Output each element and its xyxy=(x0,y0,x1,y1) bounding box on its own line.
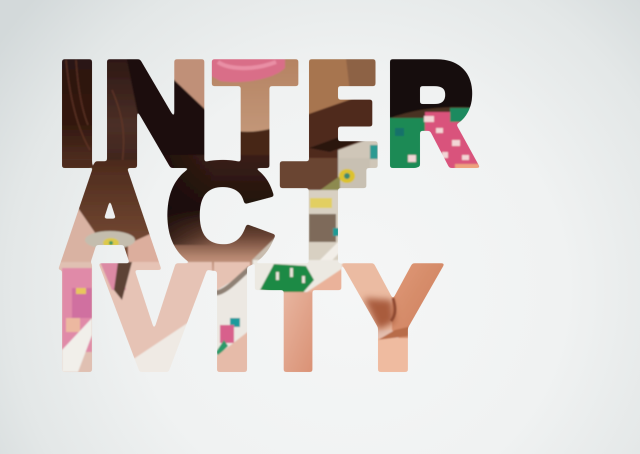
letter Y xyxy=(342,260,446,376)
letter R floral xyxy=(390,106,480,168)
necklace on T stem xyxy=(308,168,366,260)
letter C necklace xyxy=(251,236,275,265)
letter C xyxy=(165,155,277,275)
photo showing through the word INTER ACT IVITY xyxy=(58,59,480,372)
letter A floral xyxy=(85,231,135,249)
letter R hair xyxy=(390,59,472,120)
letter T (row 3) xyxy=(253,260,345,376)
shadow: N diagonal xyxy=(127,59,204,159)
hair streaks xyxy=(66,60,124,165)
letter E skin xyxy=(309,59,353,116)
letter A skin xyxy=(60,208,96,263)
skin: N corner xyxy=(174,59,204,110)
letter I (row 3, second) xyxy=(213,261,251,356)
letter I (row 3) floral xyxy=(59,262,92,372)
letter A hair xyxy=(78,160,150,260)
letter E shadow xyxy=(309,100,372,159)
skin: chin and jaw xyxy=(212,59,298,133)
neck shadow xyxy=(240,128,270,156)
hair: letter I xyxy=(62,59,99,162)
hair: letter N xyxy=(101,59,140,162)
lip highlight xyxy=(218,62,276,68)
letter T (row 2) bar xyxy=(278,158,338,190)
letter V xyxy=(97,262,212,374)
base skin xyxy=(378,329,399,339)
lips xyxy=(212,59,286,82)
letter E necklace xyxy=(336,141,378,168)
